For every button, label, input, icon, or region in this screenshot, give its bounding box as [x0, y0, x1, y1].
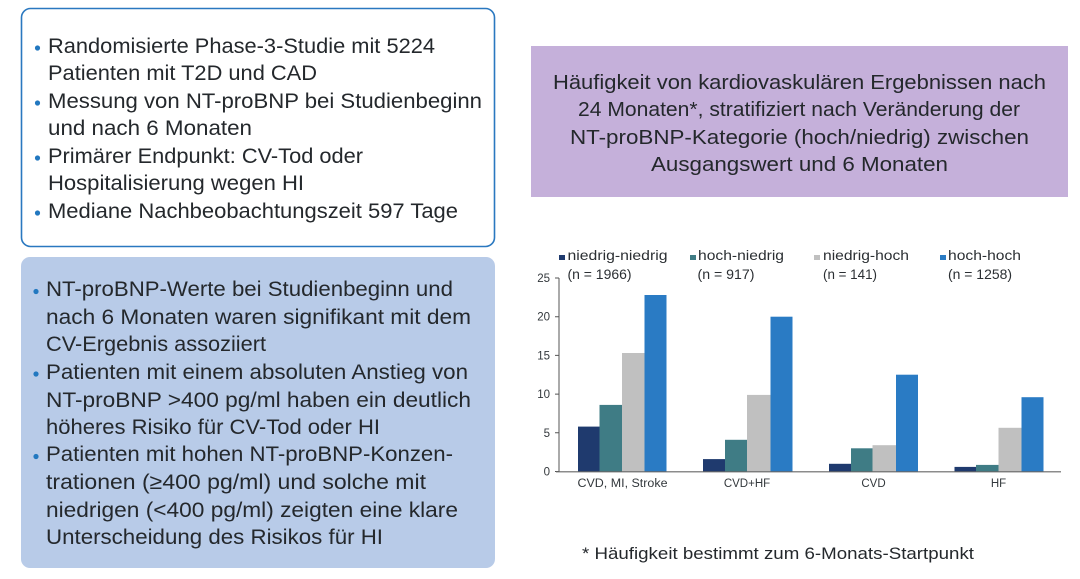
- group: CVD+HF: [703, 317, 792, 472]
- panel: results: Unterscheidung des Risikos für HI: [46, 525, 383, 549]
- y axis: 15: [537, 350, 550, 362]
- x axis labels: CVD+HF: [724, 478, 770, 490]
- panel: chart title: Häufigkeit von kardiovaskulären Ergebnissen nach: [553, 71, 1046, 94]
- chart legend: niedrig-hoch: [823, 248, 909, 263]
- panel: study design: Messung von NT-proBNP bei Studienbeginn: [48, 89, 482, 113]
- y axis: 10: [537, 389, 550, 401]
- panel: chart title: NT-proBNP-Kategorie (hoch/niedrig) zwischen: [570, 126, 1029, 149]
- panel: study design: Primärer Endpunkt: CV-Tod oder: [48, 144, 363, 168]
- footnote: * Häufigkeit bestimmt zum 6-Monats-Startpunkt: [582, 545, 974, 563]
- chart legend: (n = 141): [823, 267, 877, 282]
- chart legend: [559, 248, 1021, 282]
- panel: study design: und nach 6 Monaten: [48, 116, 252, 140]
- y axis: 25: [537, 273, 550, 285]
- group: CVD, MI, Stroke: [578, 295, 666, 472]
- panel: chart title: 24 Monaten*, stratifiziert nach Veränderung der: [578, 98, 1020, 121]
- y axis: 0: [544, 466, 550, 478]
- y axis: 5: [544, 428, 550, 440]
- y axis: 20: [537, 312, 550, 324]
- panel: results: NT-proBNP >400 pg/ml haben ein deutlich: [46, 388, 471, 412]
- chart legend: hoch-niedrig: [698, 248, 784, 263]
- panel: results: [21, 257, 495, 568]
- bar chart: [537, 273, 1061, 490]
- panel: results: niedrigen (<400 pg/ml) zeigten eine klare: [46, 498, 458, 522]
- panel: results: nach 6 Monaten waren signifikant mit dem: [46, 305, 471, 329]
- panel: study design: [22, 8, 494, 246]
- group: CVD: [829, 375, 918, 472]
- panel: chart title: [531, 46, 1068, 197]
- x axis labels: HF: [991, 478, 1006, 490]
- panel: study design: Randomisierte Phase-3-Studie mit 5224: [48, 34, 435, 58]
- panel: results: Patienten mit hohen NT-proBNP-Konzen-: [46, 442, 453, 466]
- chart legend: (n = 1966): [568, 267, 632, 282]
- y axis: [537, 273, 559, 478]
- x axis labels: CVD: [861, 478, 886, 490]
- x axis labels: CVD, MI, Stroke: [578, 478, 668, 490]
- chart legend: niedrig-niedrig: [568, 248, 668, 263]
- group: HF: [954, 397, 1044, 472]
- x axis labels: [578, 478, 1006, 490]
- panel: study design: Patienten mit T2D und CAD: [48, 61, 317, 85]
- chart legend: (n = 917): [698, 267, 754, 282]
- panel: results: Patienten mit einem absoluten Anstieg von: [46, 360, 468, 384]
- panel: results: NT-proBNP-Werte bei Studienbeginn und: [46, 277, 453, 301]
- panel: study design: Mediane Nachbeobachtungszeit 597 Tage: [48, 199, 458, 223]
- chart legend: (n = 1258): [948, 267, 1012, 282]
- panel: results: trationen (≥400 pg/ml) und solche mit: [46, 470, 426, 494]
- chart legend: hoch-hoch: [948, 248, 1021, 263]
- panel: results: höheres Risiko für CV-Tod oder HI: [46, 415, 380, 439]
- panel: study design: Hospitalisierung wegen HI: [48, 171, 304, 195]
- panel: chart title: Ausgangswert und 6 Monaten: [651, 153, 948, 176]
- panel: results: CV-Ergebnis assoziiert: [46, 332, 266, 356]
